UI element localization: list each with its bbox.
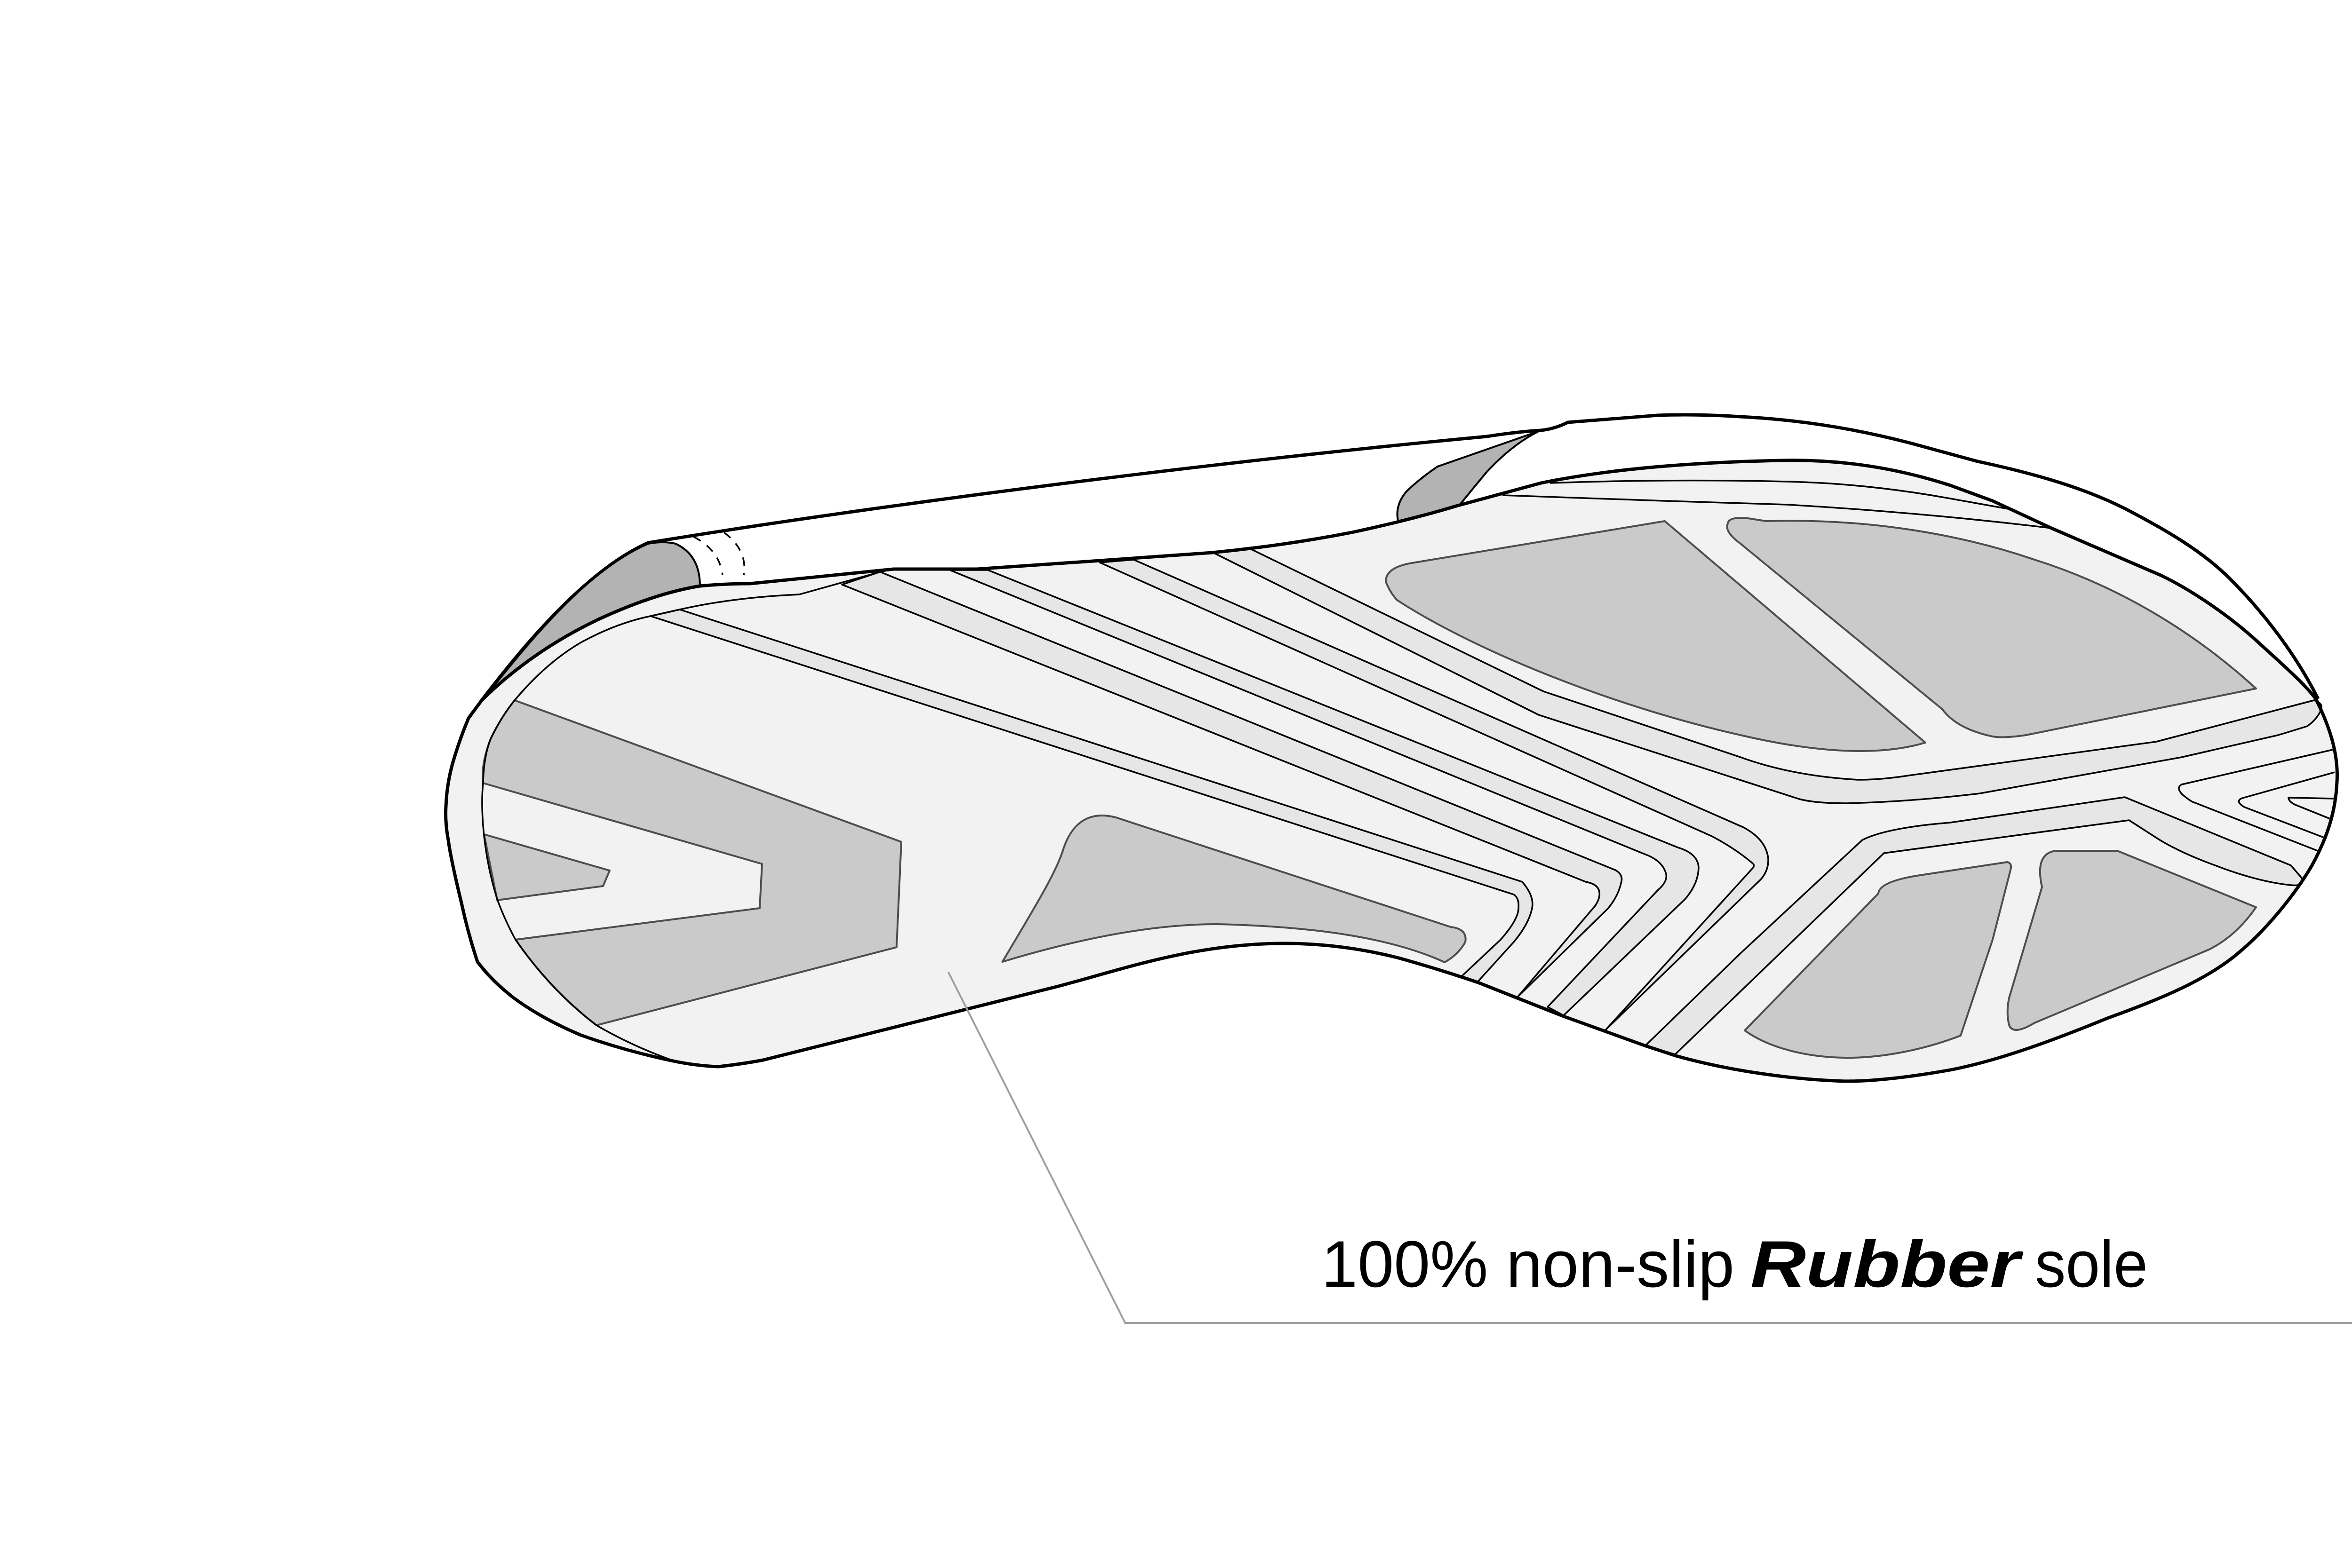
callout text xyxy=(1321,1227,2148,1301)
callout leader line xyxy=(948,972,2352,1323)
sole outer outline xyxy=(446,460,2337,1081)
toe pad left xyxy=(1745,862,2011,1058)
toe pad right xyxy=(2008,851,2256,1030)
callout text: sole xyxy=(2035,1227,2148,1301)
inner heel contour line xyxy=(482,569,894,1061)
dashed stitching xyxy=(693,532,744,575)
sole base xyxy=(446,460,2337,1081)
grey heel patch xyxy=(486,542,700,695)
callout text: 100% non-slip xyxy=(1321,1227,1734,1301)
heel pad large xyxy=(483,700,901,1025)
sole tread stripes xyxy=(651,548,2321,1054)
callout text: Rubber xyxy=(1750,1227,2024,1301)
toe contour lines xyxy=(1502,481,2335,852)
shoe upper outline xyxy=(482,415,2318,700)
grey toe flap xyxy=(1397,431,1539,521)
arch pad xyxy=(1002,816,1466,962)
heel pad small xyxy=(484,834,610,900)
grey tread pads xyxy=(483,518,2256,1058)
forefoot pad right xyxy=(1727,518,2256,737)
forefoot pad left xyxy=(1386,521,1925,751)
